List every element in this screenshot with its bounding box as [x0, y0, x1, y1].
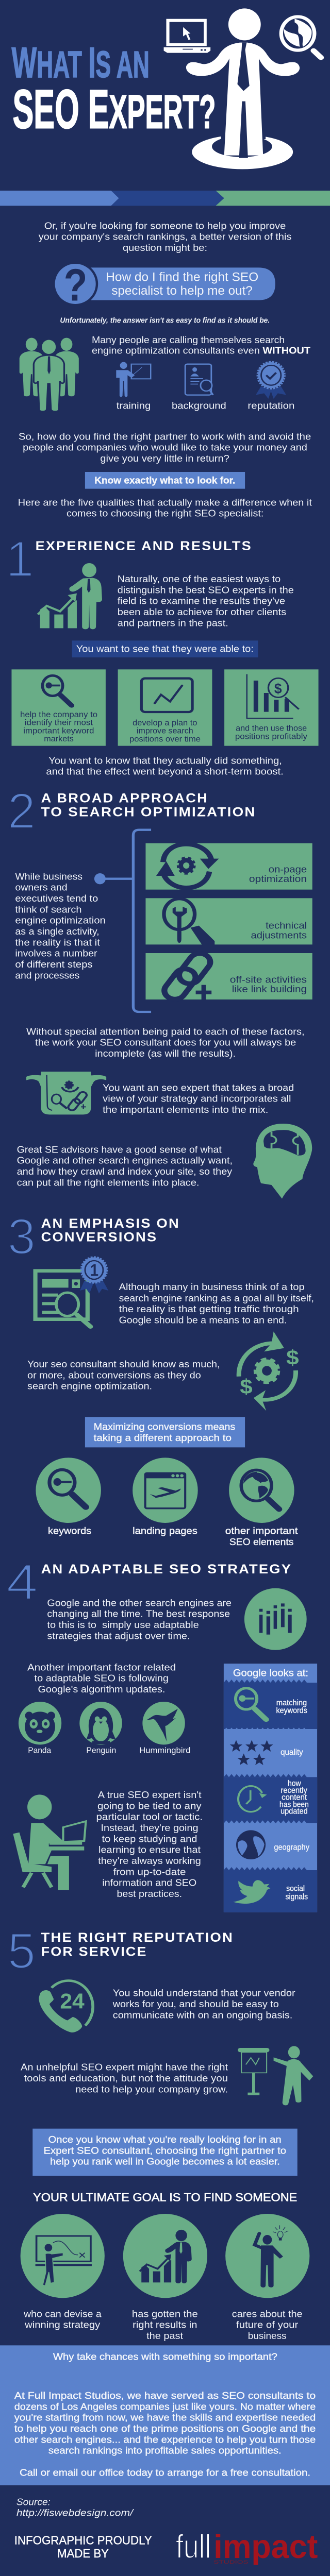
icon: hummingbird [142, 1702, 185, 1744]
text: single activity paragraph: engine optimization [15, 916, 106, 926]
text: true SEO expert: Instead, they're going [101, 1823, 198, 1833]
text: true SEO expert: to keep studying and [102, 1834, 197, 1844]
text: means to an end: the reality is that getting traffic through [119, 1304, 299, 1314]
callout: once you know [32, 2129, 298, 2176]
text: algorithm updates: to adaptable SEO is following [35, 1673, 169, 1684]
text: algorithm updates: Google's algorithm updates. [38, 1684, 165, 1694]
text: consultant conversions: Your seo consultant should know as much, [27, 1359, 220, 1369]
intro text: Or, if you're looking for someone to help you improve [44, 221, 286, 231]
text: algorithm updates: Another important factor related [27, 1662, 176, 1673]
icon: search page with first place ribbon: 1 [90, 1261, 98, 1280]
logo: full impact studios: full [176, 2528, 211, 2565]
heading 2 [41, 791, 256, 819]
text: examine results: field is to examine the results they've [118, 596, 285, 606]
heading 3: AN EMPHASIS ON [41, 1216, 180, 1230]
text: great advisors [17, 1144, 233, 1188]
text: without special attention [26, 1026, 305, 1059]
text: broad view: the important elements into the mix. [103, 1105, 268, 1115]
row: geography [224, 1820, 309, 1859]
label: other important SEO elements [225, 1526, 298, 1547]
source [16, 2497, 134, 2518]
text: single activity paragraph: think of search [15, 904, 81, 915]
text: without special attention: the work your SEO consultant does for you will always be [35, 1038, 296, 1048]
panel: off-site activities [145, 950, 312, 1003]
icon: conversion cycle gear: $ [286, 1346, 299, 1369]
text: broad view [103, 1082, 294, 1115]
text: true SEO expert: from up-to-date [113, 1867, 186, 1877]
card: keyword markets: identify their most [25, 718, 93, 727]
text: algorithm updates [27, 1662, 176, 1694]
card: keyword markets: markets [44, 734, 74, 743]
intro text [39, 221, 291, 253]
callout: once you know: Once you know what you're really looking for in an [48, 2134, 282, 2145]
callout: once you know: help you rank well in Google becomes a lot easier. [50, 2157, 280, 2167]
text: single activity paragraph: While business [15, 871, 82, 882]
text: changing all the time: changing all the time. The best response [47, 1609, 230, 1619]
card: improve search positions [118, 669, 212, 746]
text: broad view: You want an seo expert that takes a broad [103, 1082, 294, 1093]
text: true SEO expert: going to be tied to any [97, 1801, 202, 1811]
panel: on-page optimization: on-page [269, 864, 307, 875]
icon: panda [19, 1702, 61, 1744]
icon: 24 hour phone [39, 1980, 93, 2032]
circle icon: winning strategy [21, 2214, 105, 2298]
row: social signals [224, 1867, 317, 1912]
label: right results [132, 2309, 198, 2341]
text: changing all the time: strategies that adjust over time. [47, 1631, 190, 1641]
label: right results: right results in [133, 2320, 197, 2330]
label: future of business: future of your [236, 2320, 298, 2330]
text: great advisors: Great SE advisors have a good sense of what [17, 1144, 222, 1155]
text: great advisors: can put all the right elements into place. [17, 1177, 200, 1188]
text: unhelpful expert: tools and education, but not the attitude you [24, 2073, 228, 2083]
bracket connector [94, 830, 151, 1012]
card: improve search positions: develop a plan to [133, 718, 197, 727]
italic note: Unfortunately, the answer isn't as easy to find as it should be. [60, 316, 270, 325]
row: social signals: signals [285, 1892, 308, 1901]
labels: Panda Penguin Hummingbird [28, 1745, 190, 1755]
text: true SEO expert: information and SEO [102, 1878, 196, 1888]
question callout [53, 260, 275, 310]
row: recency: how [288, 1778, 301, 1788]
text: unhelpful expert: need to help your company grow. [75, 2084, 228, 2095]
text: unhelpful expert [21, 2062, 228, 2095]
text: unhelpful expert: An unhelpful SEO expert might have the right [21, 2062, 228, 2073]
heading 2: A BROAD APPROACH [41, 791, 208, 805]
text: true SEO expert: they're always working [98, 1856, 201, 1866]
panel: on-page optimization: optimization [249, 874, 307, 884]
icon: search page with first place ribbon [36, 1257, 108, 1327]
label: training: training [117, 400, 151, 411]
title [11, 38, 216, 140]
text: great advisors: and how they crawl and index your site, so they [17, 1166, 233, 1177]
question text [19, 431, 311, 464]
icon: laptop with cursor [164, 19, 210, 53]
five qualities text: comes to choosing the right SEO specialist: [67, 509, 263, 519]
text: true SEO expert: learning to ensure that [98, 1845, 201, 1855]
text: examine results: and partners in the past. [118, 618, 228, 629]
text: single activity paragraph: of different steps [15, 959, 93, 970]
icon: 24 hour phone: 24 [60, 1989, 85, 2013]
text: easy to communicate: You should understand that your vendor [113, 1988, 295, 1998]
text: single activity paragraph [15, 871, 106, 981]
callout: maximizing conversions: taking a different approach to [94, 1433, 232, 1443]
circle icon: future of business [225, 2214, 309, 2298]
label: right results: the past [146, 2331, 183, 2341]
question text: give you very little in return? [100, 453, 229, 464]
label: winning strategy: winning strategy [24, 2320, 101, 2330]
text: examine results: been able to achieve for other clients [118, 607, 286, 617]
number 1: 1 [6, 531, 34, 587]
row: recency: updated [280, 1806, 308, 1816]
icon: expert figure standing on ring [186, 8, 300, 169]
panel: Google looks at [224, 1664, 317, 1912]
card: improve search positions: positions over time [129, 734, 201, 743]
label: future of business: business [248, 2331, 287, 2341]
heading: ultimate goal: YOUR ULTIMATE GOAL IS TO FIND SOMEONE [33, 2192, 297, 2204]
icon: penguin [79, 1702, 122, 1744]
ribbon divider [0, 191, 330, 206]
text: means to an end: Although many in business think of a top [119, 1282, 305, 1292]
text: easy to communicate: communicate with on an ongoing basis. [113, 2010, 292, 2021]
icon: conversion cycle gear: $ [240, 1376, 253, 1398]
number 4: 4 [6, 1554, 38, 1610]
callout: want to see: You want to see that they were able to: [76, 644, 254, 654]
label: other important SEO elements: other important [225, 1526, 298, 1536]
text: single activity paragraph: and processes [15, 970, 79, 981]
source: Source: [16, 2497, 51, 2507]
text: true SEO expert: best practices. [117, 1889, 182, 1899]
callout: know what to look for: Know exactly what to look for. [94, 475, 235, 486]
text: single activity paragraph: owners and [15, 883, 68, 893]
text: true SEO expert: A true SEO expert isn't [98, 1790, 202, 1800]
source: http://fiswebdesign.com/ [16, 2508, 134, 2518]
title: WHAT IS AN [11, 38, 150, 87]
row: geography: geography [274, 1842, 309, 1852]
intro text: question might be: [123, 243, 207, 253]
callout: know what to look for [85, 472, 245, 489]
heading 1: EXPERIENCE AND RESULTS [36, 539, 252, 553]
logo: full impact studios: STUDIOS [213, 2560, 249, 2565]
panel: call to action: Why take chances with something so important? [53, 2351, 277, 2362]
label: background: background [172, 400, 226, 411]
row: recency [224, 1774, 317, 1823]
panel: call to action [0, 2345, 330, 2485]
text: great advisors: Google and other search engines actually want, [17, 1156, 233, 1166]
icon: group of consultants [20, 338, 79, 412]
text: consultant conversions [27, 1359, 220, 1392]
panel heading: Google looks at: [233, 1667, 308, 1679]
logo: full impact studios [176, 2528, 318, 2565]
icon: pot of SEO elements [26, 1072, 106, 1114]
row: recency: content [282, 1792, 307, 1802]
label: future of business [232, 2309, 303, 2341]
heading 4: AN ADAPTABLE SEO STRATEGY [41, 1562, 292, 1576]
labels: Panda Penguin Hummingbird: Penguin [86, 1745, 116, 1755]
row: recency: has been [279, 1800, 309, 1809]
number 2: 2 [8, 783, 36, 839]
text: means to an end: Google should be a means to an end. [119, 1315, 287, 1326]
text: easy to communicate: works for you, and should be easy to [112, 1999, 279, 2009]
text: single activity paragraph: as a single activity, [15, 926, 100, 937]
text: examine results: Naturally, one of the easiest ways to [118, 574, 280, 584]
icon: conversion cycle gear [239, 1331, 299, 1411]
intro text: your company's search rankings, a better version of this [39, 232, 291, 242]
icon: training [116, 362, 151, 397]
icon: presenter at chart board [238, 2046, 313, 2105]
text: easy to communicate [112, 1988, 295, 2021]
heading 2: TO SEARCH OPTIMIZATION [41, 805, 256, 819]
without text [92, 335, 310, 356]
icon: head with puzzle brain [253, 1124, 312, 1199]
text: effect beyond short-term boost: You want to know that they actually did something, [48, 755, 282, 766]
panel: technical adjustments: technical [266, 921, 307, 931]
credit text: MADE BY [57, 2547, 109, 2560]
label: winning strategy [23, 2309, 102, 2330]
question callout: specialist to help me out? [111, 284, 253, 297]
label: winning strategy: who can devise a [23, 2309, 102, 2319]
text: means to an end [119, 1282, 314, 1326]
text: effect beyond short-term boost [46, 755, 284, 777]
icon: man with growth chart [38, 563, 102, 629]
text: broad view: view of your strategy and incorporates all [103, 1094, 291, 1104]
number 5: 5 [8, 1923, 36, 1979]
label: landing pages: landing pages [133, 1526, 197, 1536]
row: matching keywords [224, 1680, 317, 1729]
card: profitable positions: $ [274, 681, 282, 697]
text: single activity paragraph: the reality is that it [15, 937, 100, 948]
label: right results: has gotten the [132, 2309, 198, 2319]
panel: on-page optimization [145, 843, 312, 890]
icon: reputation badge [256, 362, 286, 399]
label: reputation: reputation [248, 400, 294, 411]
text: true SEO expert: particular tool or tactic. [96, 1812, 203, 1822]
callout: once you know: Expert SEO consultant, choosing the right partner to [43, 2145, 286, 2156]
icon: person at laptop [13, 1794, 86, 1890]
text: single activity paragraph: involves a number [15, 948, 97, 959]
card: keyword markets: important keyword [23, 726, 94, 735]
row: matching keywords: keywords [276, 1706, 307, 1715]
row: matching keywords: matching [276, 1698, 307, 1707]
circle icon: right results [123, 2214, 207, 2298]
callout: want to see [72, 640, 258, 657]
text: consultant conversions: search engine optimization. [27, 1381, 152, 1392]
heading 5: FOR SERVICE [41, 1944, 147, 1959]
card: profitable positions: positions profitably [235, 732, 307, 741]
card: improve search positions: improve search [137, 726, 193, 735]
credit text: INFOGRAPHIC PROUDLY [14, 2534, 152, 2547]
panel: technical adjustments: adjustments [251, 930, 307, 941]
callout: maximizing conversions [85, 1417, 245, 1447]
text: changing all the time: Google and the other search engines are [47, 1598, 232, 1608]
card: keyword markets [11, 669, 106, 746]
text: without special attention: incomplete (as will the results). [95, 1048, 236, 1059]
callout: maximizing conversions: Maximizing conversions means [94, 1422, 235, 1432]
heading 5 [41, 1930, 234, 1959]
card: keyword markets: help the company to [20, 710, 97, 719]
card: profitable positions: and then use those [236, 723, 307, 733]
circle icon: other SEO elements [229, 1458, 294, 1523]
text: examine results: distinguish the best SEO experts in the [118, 585, 294, 596]
label: future of business: cares about the [232, 2309, 303, 2319]
text: consultant conversions: or more, about conversions as they do [27, 1370, 201, 1381]
panel: off-site activities: off-site activities [230, 974, 307, 985]
heading 3: CONVERSIONS [41, 1230, 157, 1244]
icon: background [185, 364, 213, 395]
circle icon: keywords [36, 1458, 101, 1523]
panel: call to action: search rankings into profitable sales opportunities. [48, 2446, 282, 2456]
label: other important SEO elements: SEO elements [229, 1537, 293, 1547]
text: effect beyond short-term boost: and that the effect went beyond a short-term boost. [46, 767, 284, 777]
title: SEO EXPERT? [12, 79, 216, 140]
row: quality [224, 1727, 307, 1765]
without text: engine optimization consultants even WITHOUT [92, 346, 310, 356]
heading 3 [41, 1216, 180, 1244]
text: true SEO expert [96, 1790, 203, 1899]
question callout: ? [64, 260, 87, 310]
label: keywords: keywords [48, 1526, 91, 1536]
text: single activity paragraph: executives tend to [15, 893, 98, 904]
without text: Many people are calling themselves search [92, 335, 285, 345]
five qualities text [18, 497, 312, 519]
icon: globe magnifier [279, 15, 321, 58]
question callout: How do I find the right SEO [106, 270, 258, 284]
panel: technical adjustments [145, 898, 312, 945]
labels: Panda Penguin Hummingbird: Hummingbird [139, 1745, 190, 1755]
panel: off-site activities: like link building [232, 984, 307, 994]
row: quality: quality [280, 1748, 303, 1757]
credit text [14, 2534, 152, 2560]
row: social signals: social [286, 1884, 305, 1893]
icon: adjustment sliders [244, 1588, 307, 1650]
labels: Panda Penguin Hummingbird: Panda [28, 1745, 51, 1755]
text: examine results [118, 574, 294, 629]
text: changing all the time [47, 1598, 232, 1641]
circle icon: landing pages [133, 1458, 198, 1523]
heading 5: THE RIGHT REPUTATION [41, 1930, 234, 1944]
panel: call to action: At Full Impact Studios, we have served as SEO consultants to [14, 2391, 316, 2401]
card: profitable positions [224, 669, 319, 746]
row: recency: recently [280, 1786, 307, 1795]
text: changing all the time: to this is to simply use adaptable [47, 1620, 199, 1630]
number 3: 3 [8, 1209, 36, 1265]
